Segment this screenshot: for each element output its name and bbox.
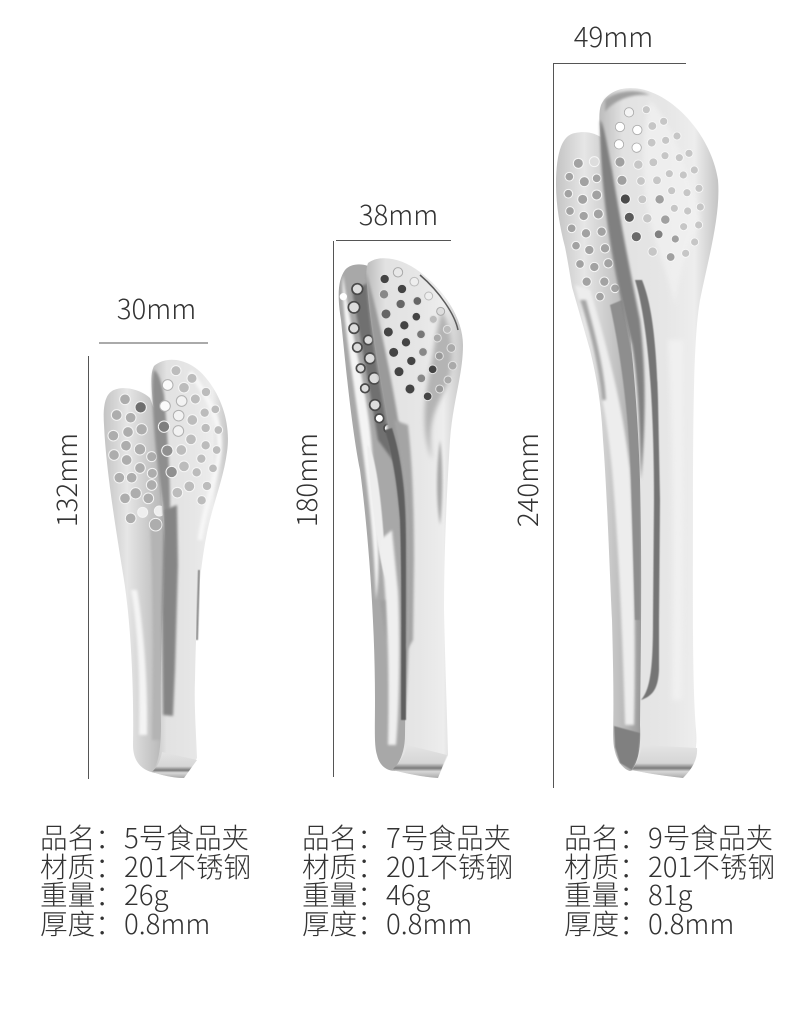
spec block: size 7: 重量： xyxy=(302,873,385,913)
front arm xyxy=(151,360,228,778)
width label: 30mm: 30mm xyxy=(117,287,196,327)
spec block: size 5: 重量： xyxy=(40,873,123,913)
spec block: size 7: 厚度： xyxy=(302,902,385,942)
spec block: size 5: 26g xyxy=(124,873,169,913)
dimension lines: size 5 xyxy=(88,343,208,779)
spec block: size 7: 0.8mm xyxy=(386,902,472,942)
spec block: size 9: 品名： xyxy=(564,816,647,856)
spec block: size 9: 厚度： xyxy=(564,902,647,942)
spec block: size 7: 材质： xyxy=(302,845,385,885)
spec block: size 5: 品名： xyxy=(40,816,123,856)
width label: 49mm: 49mm xyxy=(574,15,653,55)
spec block: size 5: 5号食品夹 xyxy=(124,816,249,856)
spec block: size 9: 材质： xyxy=(564,845,647,885)
tongs: size 7 xyxy=(339,258,463,778)
width label: 38mm: 38mm xyxy=(359,193,438,233)
height label: 132mm: 132mm xyxy=(45,433,85,527)
spec block: size 9 xyxy=(564,816,775,942)
tongs: size 9 xyxy=(556,88,718,778)
spec block: size 5 xyxy=(40,816,251,942)
spec block: size 5: 材质： xyxy=(40,845,123,885)
spec block: size 5: 0.8mm xyxy=(124,902,210,942)
dimension lines: size 9 xyxy=(553,64,686,788)
back arm xyxy=(556,132,650,771)
front arm xyxy=(366,258,463,778)
spec block: size 5: 201不锈钢 xyxy=(124,845,251,885)
height label: 180mm: 180mm xyxy=(285,433,325,527)
spec block: size 9: 0.8mm xyxy=(648,902,734,942)
spec block: size 7: 7号食品夹 xyxy=(386,816,511,856)
back arm xyxy=(339,264,420,771)
height label: 240mm: 240mm xyxy=(506,433,546,527)
spec block: size 7: 46g xyxy=(386,873,431,913)
front arm xyxy=(599,88,718,778)
spec block: size 7 xyxy=(302,816,513,942)
back arm xyxy=(104,388,182,773)
tongs: size 5 xyxy=(104,360,228,778)
spec block: size 5: 厚度： xyxy=(40,902,123,942)
spec block: size 9: 81g xyxy=(648,873,693,913)
dimension lines: size 7 xyxy=(334,240,451,777)
spec block: size 9: 9号食品夹 xyxy=(648,816,773,856)
spec block: size 9: 重量： xyxy=(564,873,647,913)
spec block: size 9: 201不锈钢 xyxy=(648,845,775,885)
spec block: size 7: 品名： xyxy=(302,816,385,856)
spec block: size 7: 201不锈钢 xyxy=(386,845,513,885)
